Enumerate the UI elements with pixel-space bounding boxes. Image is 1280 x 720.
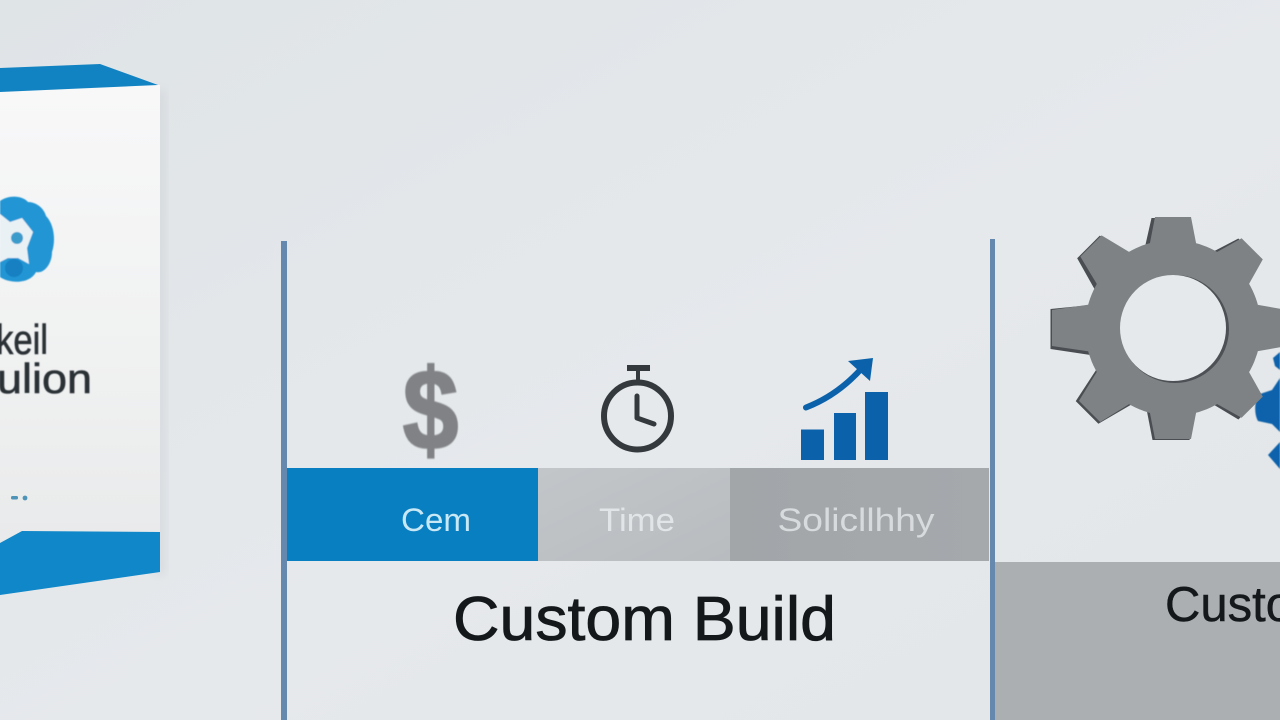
box title text: [0, 316, 92, 402]
box logo: [0, 197, 54, 282]
icon: growth chart: [801, 358, 888, 460]
icon: grey gear: [1050, 217, 1280, 440]
metric: time: [538, 468, 730, 561]
panel: second custom option: [995, 562, 1280, 720]
icon: dollar sign: $: [403, 346, 458, 473]
metric: scalability: Solicllhhy: [778, 502, 934, 538]
box small mark: [11, 496, 27, 500]
heading: custom build: Custom Build: [453, 585, 836, 654]
icon: stopwatch: [604, 368, 671, 450]
panel right rule: [990, 239, 995, 720]
metric: scalability: [730, 468, 989, 561]
box top band: [0, 64, 158, 92]
panel: custom build: [281, 239, 995, 720]
metric: cost: Cem: [401, 502, 471, 538]
metric bar: [287, 468, 989, 561]
box front face: [0, 85, 160, 540]
metric: time: Time: [599, 502, 675, 538]
box bottom band: [0, 531, 160, 595]
product box: [0, 64, 166, 595]
panel left rule: [281, 241, 287, 720]
metric: cost: [287, 468, 538, 561]
icon: blue gear: [1255, 352, 1280, 469]
